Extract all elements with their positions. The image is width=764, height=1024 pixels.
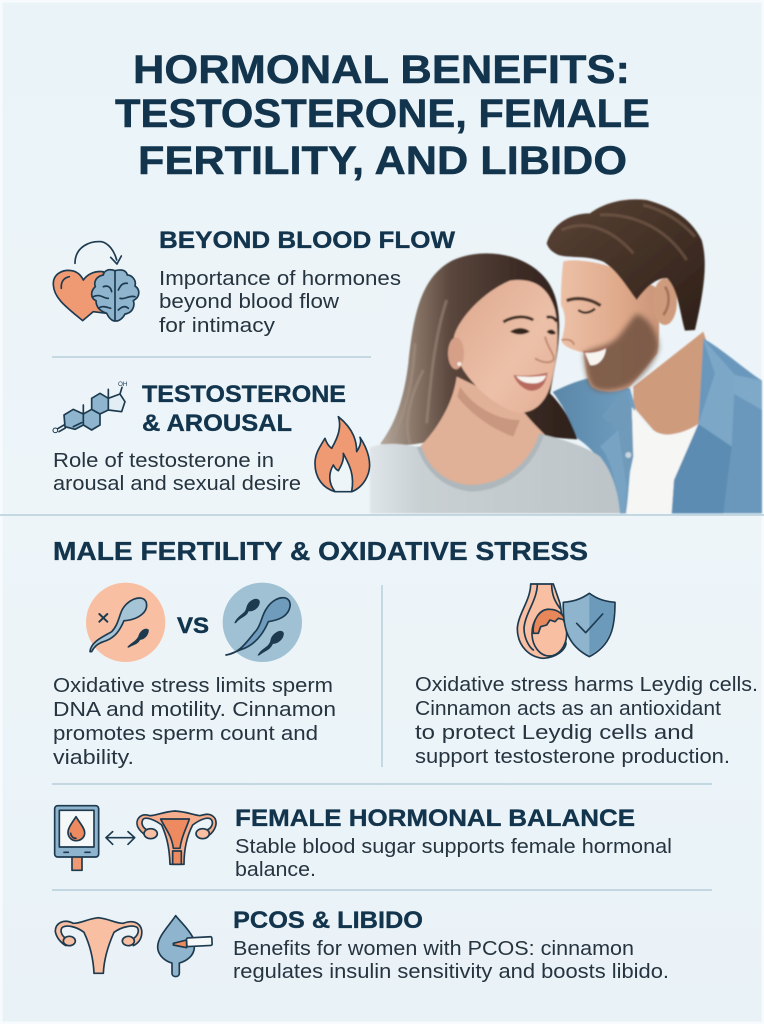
text: importance of hormones: for intimacy bbox=[159, 314, 276, 337]
heading: pcos and libido: PCOS & LIBIDO bbox=[233, 907, 423, 934]
icon: glucose meter, arrow and uterus bbox=[55, 806, 216, 870]
text: stable blood sugar: balance. bbox=[235, 858, 316, 881]
text: oxidative stress limits sperm: viability. bbox=[53, 746, 134, 769]
title: HORMONAL BENEFITS: bbox=[133, 48, 630, 92]
text: importance of hormones bbox=[159, 267, 401, 337]
text: oxidative stress harms leydig cells: Oxidative stress harms Leydig cells. bbox=[415, 673, 758, 696]
icon: damaged sperm bbox=[86, 583, 165, 662]
text: oxidative stress harms leydig cells: support testosterone production. bbox=[415, 745, 730, 768]
heading: testosterone and arousal: TESTOSTERONE bbox=[142, 381, 346, 408]
panel: sperm comparison bbox=[53, 583, 336, 769]
heading: female hormonal balance: FEMALE HORMONAL BALANCE bbox=[235, 805, 635, 832]
heading: testosterone and arousal bbox=[142, 381, 346, 437]
text: oxidative stress limits sperm: Oxidative stress limits sperm bbox=[53, 674, 333, 697]
panel: leydig cells bbox=[415, 584, 758, 768]
title: TESTOSTERONE, FEMALE bbox=[115, 92, 650, 136]
text: role of testosterone bbox=[53, 449, 301, 495]
text: oxidative stress harms leydig cells bbox=[415, 673, 758, 768]
title bbox=[115, 48, 650, 183]
divider under photo bbox=[0, 514, 764, 516]
text: importance of hormones: beyond blood flow bbox=[159, 290, 339, 313]
heading: testosterone and arousal: & AROUSAL bbox=[142, 410, 292, 437]
text: role of testosterone: arousal and sexual desire bbox=[53, 472, 301, 495]
section: testosterone and arousal bbox=[53, 381, 370, 495]
text: oxidative stress limits sperm: promotes sperm count and bbox=[53, 722, 318, 745]
text: stable blood sugar bbox=[235, 835, 672, 881]
icon: testis and shield bbox=[517, 584, 615, 658]
icon: heart and brain with arrow bbox=[53, 242, 139, 321]
text: role of testosterone: Role of testosterone in bbox=[53, 449, 274, 472]
text: oxidative stress limits sperm: DNA and motility. Cinnamon bbox=[53, 698, 336, 721]
text: vs: VS bbox=[177, 613, 209, 638]
text: oxidative stress limits sperm bbox=[53, 674, 336, 769]
text: benefits for women with pcos bbox=[233, 937, 669, 983]
text: benefits for women with pcos: regulates insulin sensitivity and boosts libido. bbox=[233, 960, 669, 983]
text: oxidative stress harms leydig cells: Cinnamon acts as an antioxidant bbox=[415, 697, 721, 720]
icon: uterus and insulin drop bbox=[55, 916, 212, 977]
title: FERTILITY, AND LIBIDO bbox=[138, 139, 627, 183]
section: female hormonal balance bbox=[55, 805, 672, 881]
photo: smiling couple bbox=[370, 199, 762, 513]
icon: healthy sperm bbox=[223, 583, 302, 662]
section: pcos and libido bbox=[55, 907, 669, 983]
text: stable blood sugar: Stable blood sugar supports female hormonal bbox=[235, 835, 672, 858]
icon: testosterone molecule bbox=[53, 381, 128, 433]
text: importance of hormones: Importance of hormones bbox=[159, 267, 401, 290]
icon: flame bbox=[315, 417, 370, 492]
icon: testosterone molecule: OH bbox=[118, 381, 128, 388]
heading: beyond blood flow: BEYOND BLOOD FLOW bbox=[159, 227, 455, 254]
heading: male fertility and oxidative stress: MALE FERTILITY & OXIDATIVE STRESS bbox=[53, 536, 588, 566]
text: oxidative stress harms leydig cells: to protect Leydig cells and bbox=[415, 721, 694, 744]
section: beyond blood flow bbox=[53, 227, 455, 337]
text: benefits for women with pcos: Benefits for women with PCOS: cinnamon bbox=[233, 937, 634, 960]
